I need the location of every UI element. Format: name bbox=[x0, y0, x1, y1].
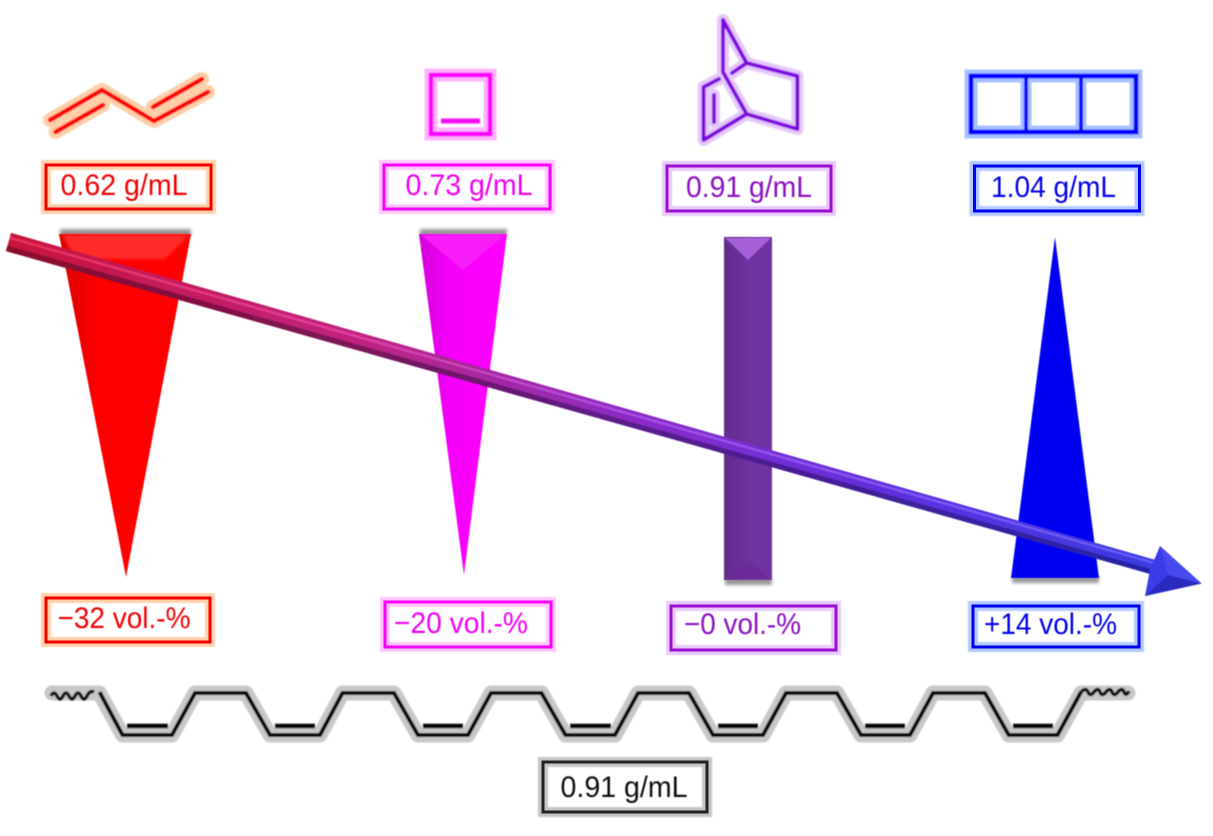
density label: 0.62 g/mL: 0.62 g/mL bbox=[60, 169, 188, 202]
density label: 0.62 g/mL bbox=[46, 165, 211, 209]
volume label: -20 vol.-% bbox=[385, 602, 551, 647]
volume label: -32 vol.-%: −32 vol.-% bbox=[58, 602, 190, 635]
gradient arrow: increasing density bbox=[6, 233, 1201, 596]
molecule icon: cyclobutene bbox=[431, 75, 490, 134]
volume label: +14 vol.-%: +14 vol.-% bbox=[984, 608, 1117, 641]
volume label: -0 vol.-%: −0 vol.-% bbox=[684, 608, 801, 641]
density label: polymer 0.91 g/mL bbox=[543, 762, 707, 812]
density label: 0.91 g/mL purple: 0.91 g/mL bbox=[686, 171, 812, 204]
volume label: -20 vol.-%: −20 vol.-% bbox=[394, 607, 528, 640]
volume label: -32 vol.-% bbox=[46, 598, 210, 642]
molecule icon: norbornene bbox=[704, 20, 797, 140]
density label: 0.91 g/mL purple bbox=[667, 166, 831, 211]
density label: polymer 0.91 g/mL: 0.91 g/mL bbox=[560, 771, 688, 804]
density label: 1.04 g/mL bbox=[974, 166, 1140, 211]
density label: 0.73 g/mL bbox=[384, 165, 550, 209]
blue wedge: volume increase bbox=[1011, 237, 1099, 583]
density label: 1.04 g/mL: 1.04 g/mL bbox=[991, 171, 1116, 204]
purple bar: no volume change bbox=[724, 237, 772, 585]
molecule icon: ladderane bbox=[971, 76, 1136, 132]
magenta wedge: volume decrease bbox=[419, 229, 507, 575]
red wedge: volume decrease bbox=[59, 229, 191, 577]
volume label: -0 vol.-% bbox=[671, 606, 836, 650]
polymer chain: polybutadiene bbox=[51, 690, 1129, 735]
volume label: +14 vol.-% bbox=[973, 606, 1139, 647]
molecule icon: butadiene bbox=[50, 79, 208, 132]
density label: 0.73 g/mL: 0.73 g/mL bbox=[406, 169, 532, 202]
